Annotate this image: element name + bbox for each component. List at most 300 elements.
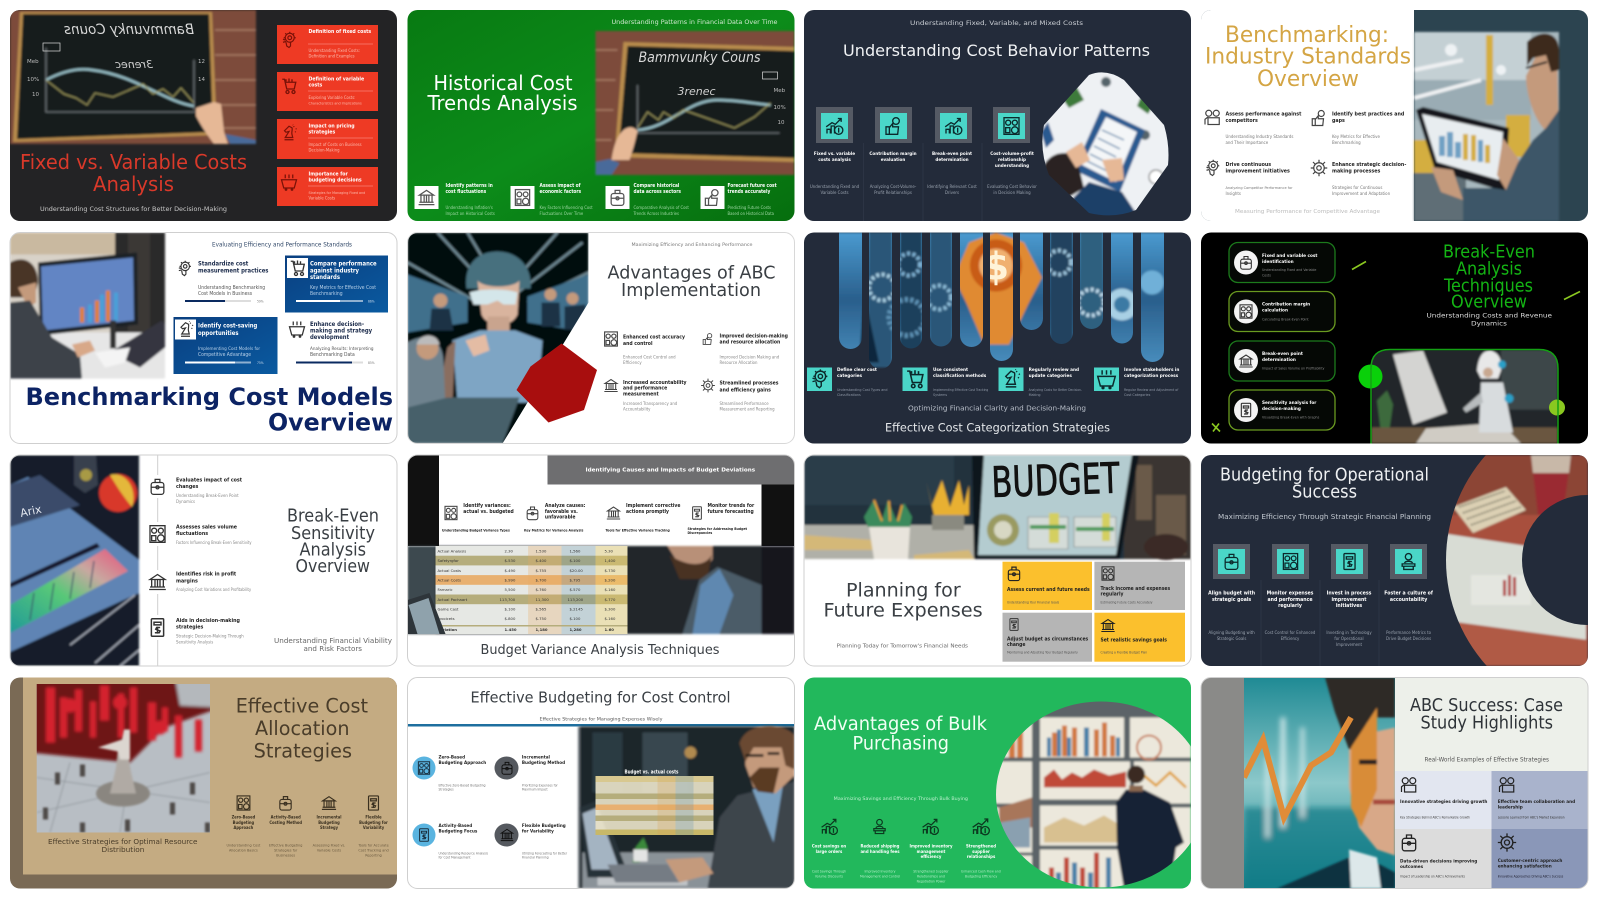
item: invest in process: initiatives	[1336, 603, 1362, 609]
photo: budget table and analyst: 1.530	[536, 548, 547, 554]
item: regularly review: update categories	[1029, 373, 1072, 379]
step: contribution margin calculation: Calculating Break-Even Point	[1262, 318, 1309, 322]
item: flexible	[358, 796, 389, 858]
item: enhanced cost accuracy: and control	[623, 341, 653, 347]
item: assess impact	[510, 183, 593, 216]
photo: budget table and analyst: 113,200	[568, 597, 584, 602]
quadrant: customer-centric: enhancing satisfaction	[1498, 864, 1552, 870]
quadrant: customer-centric: Innovative Approaches Driving ABC's Success	[1498, 874, 1564, 878]
item: drive continuous: improvement initiatives	[1226, 168, 1290, 174]
quadrant: data-driven decisions	[1395, 829, 1492, 888]
item: identify patterns: cost fluctuations	[446, 189, 487, 195]
box: importance for budgeting decisions: Variable Costs	[308, 196, 335, 200]
item: regularly review	[998, 367, 1082, 397]
item: foster accountability	[1384, 544, 1434, 642]
photo: chalkboard with cost curves: Meb	[27, 59, 39, 65]
card item: compare performance: against industry	[310, 268, 360, 274]
photo: budget table and analyst: Actual Pachaart	[438, 597, 468, 602]
photo: budget table and analyst: 1.450	[504, 627, 517, 632]
photo: chalkboard with cost curves: 12	[198, 59, 205, 65]
item: align budget: strategic goals	[1212, 597, 1251, 603]
item: incremental budgeting: Prioritizing Expenses for	[522, 784, 559, 788]
item: incremental: Incremental	[317, 814, 341, 820]
photo: budget table and analyst: 1,180	[536, 627, 548, 632]
item: incremental budgeting: Maximum Impact	[522, 788, 549, 792]
title: Sensitivity	[291, 523, 375, 544]
item: break-even point: Identifying Relevant Cost	[927, 184, 977, 190]
title	[427, 71, 578, 115]
photo: budget table and analyst: 1.60	[604, 627, 614, 632]
card: Break-Even Sensitivity Analysis Overview	[10, 455, 397, 666]
title: Break-Even	[287, 506, 379, 526]
item: align budget: Aligning Budgeting with	[1208, 630, 1255, 636]
item: monitor expenses: Efficiency	[1281, 636, 1300, 642]
title: Historical Cost	[434, 71, 573, 95]
item: strengthened supplier: Enhanced Cash Flow and	[961, 870, 1001, 874]
card item: compare performance: Compare performance	[310, 262, 377, 268]
title: Overview	[268, 408, 393, 436]
box: savings goals: Creating a Flexible Budget Plan	[1100, 650, 1147, 654]
title: Purchasing	[852, 734, 949, 754]
item: activity-based: Businesses	[276, 852, 295, 858]
item: reduced shipping	[860, 819, 900, 878]
item: identify patterns: Impact on Historical Costs	[446, 211, 495, 216]
item: incremental: Assessing Fixed vs.	[313, 842, 345, 848]
card item: enhance decision-making: 85%	[368, 361, 375, 365]
card: Benchmarking: Industry Standards Overview	[1201, 10, 1588, 221]
subtitle: and Risk Factors	[304, 645, 362, 653]
item: cost-volume-profit: Cost-volume-profit	[990, 151, 1034, 157]
card item: standardize: measurement practices	[198, 268, 268, 274]
item: cost-volume-profit: in Decision Making	[993, 190, 1031, 196]
box: savings goals: Set realistic savings goals	[1100, 638, 1167, 644]
item: define clear cost categories: Classifications	[837, 393, 861, 397]
card item: standardize: 59%	[257, 300, 264, 304]
title: Implementation	[621, 280, 761, 301]
item: forecast: trends accurately	[728, 189, 770, 195]
item: cost-volume-profit	[987, 107, 1037, 196]
photo: man viewing chart wall, in oval	[994, 698, 1191, 888]
item: assess performance	[1205, 110, 1302, 146]
header text: Understanding Patterns in Financial Data Over Time	[612, 18, 778, 26]
subtitle: Real-World Examples of Effective Strategies	[1424, 756, 1549, 764]
card: Effective Cost Allocation Strategies	[10, 678, 397, 888]
title: Effective Budgeting for Cost Control	[470, 688, 730, 706]
title: Planning for	[846, 580, 961, 602]
item: increased accountability: Increased Transparency and	[623, 401, 678, 407]
step: fixed and variable cost identification: identification	[1262, 259, 1294, 265]
item: activity-based budgeting: Understanding Resource Analysis	[438, 852, 488, 856]
item: aids decision-making: Aids in decision-making	[176, 618, 241, 624]
box: track income: Estimating Future Costs Accurately	[1100, 600, 1153, 604]
card: Historical Cost Trends Analysis	[408, 10, 794, 221]
title: Future Expenses	[824, 600, 983, 622]
title: Success	[1292, 482, 1357, 502]
budget table: Budget vs. actual costs	[624, 770, 679, 776]
photo: budget table and analyst: $.530	[504, 558, 516, 563]
item: contribution margin: Contribution margin	[869, 151, 917, 157]
title: Fixed vs. Variable Costs	[20, 150, 247, 174]
item: invest in process: Investing in Technology	[1326, 630, 1372, 636]
title: Effective Cost Categorization Strategies	[885, 420, 1110, 434]
title	[28, 386, 392, 431]
item: monitor expenses: Monitor expenses	[1267, 590, 1314, 596]
step: sensitivity analysis: Sensitivity analysis for	[1262, 400, 1317, 406]
item: reduced shipping: Reduced shipping	[861, 844, 900, 850]
item: zero-based: Zero-Based	[232, 814, 256, 820]
item: forecast	[700, 183, 777, 216]
item: monitor trends: Monitor trends for	[708, 503, 755, 509]
photo: budget table and analyst: $.300	[604, 606, 616, 612]
card item: standardize: Understanding Benchmarking	[198, 285, 265, 291]
title: Analysis	[300, 540, 366, 560]
photo: budget table and analyst: Safetyrgfor	[438, 558, 459, 563]
item: contribution margin: evaluation	[881, 157, 905, 163]
item: involve stakeholders: Involve stakeholders in	[1124, 367, 1179, 373]
title	[1207, 25, 1410, 86]
item: assess impact: Assess impact of	[540, 183, 581, 189]
item: activity-based budgeting: Activity-Based	[438, 823, 472, 829]
item: zero-based: Understanding Cost	[226, 842, 261, 848]
box: impact on pricing strategies: strategies	[308, 130, 335, 136]
card item: enhance decision-making: making and strategy	[310, 328, 373, 334]
photo: budget table and analyst: $.800	[504, 616, 516, 621]
box: importance for budgeting decisions: Strategies for Managing Fixed and	[308, 191, 365, 195]
photo: budget table and analyst: 2.30	[504, 548, 514, 554]
subtitle: Understanding Costs and Revenue	[1426, 312, 1552, 320]
photo: budget table and analyst: $.490	[504, 568, 516, 573]
step: sensitivity analysis	[1229, 390, 1335, 430]
item: break-even point: determination	[935, 157, 969, 163]
photo: budget table and analyst: $.770	[604, 597, 616, 602]
item: flexible budgeting: Financial Planning	[522, 856, 549, 860]
item: improved decision-making	[703, 334, 788, 366]
item: align budget: Align budget with	[1208, 590, 1255, 596]
item: break-even point: Break-even point	[932, 151, 972, 157]
step: break-even point determination: determination	[1262, 357, 1296, 363]
subtitle: Understanding Cost Structures for Better Decision-Making	[40, 205, 227, 213]
title: Analysis	[1456, 258, 1522, 280]
photo: chalkboard with cost curves: 10%	[27, 77, 39, 83]
photo: man at laptop with budget table	[578, 726, 794, 888]
photo: chalkboard: Meb	[774, 88, 786, 94]
title: Overview	[1451, 292, 1527, 312]
title: Trends Analysis	[427, 91, 577, 115]
photo: budget table and analyst: Actual Analysis	[438, 548, 466, 554]
title: Techniques	[1443, 276, 1533, 296]
photo: budget table and analyst: $.200	[604, 578, 616, 582]
item: invest in process	[1326, 544, 1372, 648]
box: track income: regularly	[1100, 592, 1124, 598]
item: activity-based budgeting	[412, 823, 488, 860]
item: forecast: Predicting Future Costs	[728, 205, 771, 210]
item: streamlined processes: Measurement and Reporting	[720, 406, 775, 412]
item: improved inventory: management	[917, 849, 945, 855]
photo: chalkboard with cost curves	[10, 10, 256, 144]
subtitle: Understanding Financial Viability	[274, 637, 392, 645]
item: zero-based: Approach	[234, 825, 254, 830]
photo: robot woman at desk	[1371, 350, 1558, 444]
card item: compare performance: 66%	[368, 300, 375, 304]
item: analyze causes	[524, 503, 586, 532]
item: analyze causes: Analyze causes:	[545, 503, 586, 509]
photo: budget table and analyst: $.795	[570, 578, 581, 582]
caption: Distribution	[102, 846, 144, 854]
item: assess impact: Key Factors Influencing Cost	[540, 205, 593, 210]
item: activity-based: Effective Budgeting	[269, 842, 302, 848]
quadrant: customer-centric	[1492, 829, 1588, 888]
box: assess needs: Assess current and future needs	[1007, 587, 1090, 593]
item: flexible: Tools for Accurate	[358, 842, 389, 848]
box: adjust budget	[1002, 613, 1092, 662]
quadrant: team collaboration: Effective team collaboration and	[1498, 799, 1575, 805]
photo: budget table and analyst: Actual Costs	[438, 568, 461, 573]
card item: compare performance: Key Metrics for Effective Cost	[310, 285, 376, 291]
item: assesses sales volume: Assesses sales volume	[176, 524, 237, 530]
item: zero-based	[226, 796, 261, 852]
item: involve stakeholders: categorization process	[1124, 373, 1179, 379]
box: track income: Track income and expenses	[1100, 586, 1170, 592]
box: definition of fixed costs: Definition and Examples	[308, 54, 355, 58]
title: Budget Variance Analysis Techniques	[480, 642, 720, 658]
item: improved inventory: Improved inventory	[910, 844, 953, 850]
title: Industry Standards	[1205, 44, 1411, 70]
item: contribution margin	[869, 107, 917, 196]
item: monitor trends: future forecasting	[708, 509, 754, 515]
photo: budget table and analyst: 1,560	[570, 548, 581, 554]
item: assesses sales volume: fluctuations	[176, 531, 208, 537]
item: fixed vs variable: Understanding Fixed and	[810, 184, 860, 190]
box: definition of variable costs	[277, 72, 378, 111]
item: define clear cost categories: categories	[837, 373, 863, 379]
card item: identify cost-saving: 75%	[257, 361, 264, 365]
photo: tablet with rainbow bar chart and apple	[10, 455, 139, 666]
photo: budget table and analyst: Variation	[438, 627, 457, 632]
item: reduced shipping: and handling fees	[860, 849, 900, 855]
item: streamlined processes	[701, 379, 779, 412]
item: aids decision-making: strategies	[176, 624, 203, 630]
box: impact on pricing strategies: Impact on pricing	[308, 124, 355, 130]
card: Effective Budgeting for Cost Control	[408, 678, 794, 888]
title: Study Highlights	[1420, 714, 1553, 734]
photo: man with tablet in factory	[1414, 32, 1559, 221]
box: adjust budget: change	[1007, 642, 1025, 648]
item: flexible budgeting: Utilizing Forecasting for Better	[522, 852, 568, 856]
photo: budget table and analyst: $20.00	[570, 568, 583, 573]
item: drive continuous: Analyzing Competitor Performance for	[1226, 185, 1293, 190]
step: fixed and variable cost identification	[1229, 242, 1335, 282]
step: contribution margin calculation: Contribution margin	[1262, 302, 1310, 308]
box: assess needs: Understanding Your Financial Goals	[1007, 600, 1060, 604]
item: identify patterns: Understanding Inflation's	[446, 205, 493, 210]
photo: tablet with rainbow bar chart and apple: Arix	[19, 503, 43, 520]
title: Benchmarking Cost Models	[26, 383, 393, 411]
photo: budget table and analyst: Farnaric	[438, 587, 453, 592]
step: break-even point determination: Break-even point	[1262, 351, 1303, 357]
photo: chess piece on board with red pieces	[36, 684, 210, 832]
subtitle: Effective Strategies for Managing Expenses Wisely	[540, 716, 663, 722]
item: zero-based budgeting: Strategies	[438, 788, 454, 792]
item: monitor trends	[688, 503, 755, 535]
item: identify variances: Understanding Budget Variance Types	[442, 528, 510, 532]
photo: budget table and analyst: $.755	[536, 568, 547, 573]
item: assess impact: economic factors	[540, 189, 582, 195]
item: streamlined processes: Streamlined processes	[720, 380, 779, 386]
photo: man with orange chart overlay	[1244, 678, 1395, 888]
item: foster accountability: Foster a culture of	[1384, 590, 1434, 596]
card: Budgeting for Operational Success	[1201, 455, 1600, 666]
card: Understanding Cost Behavior Patterns	[804, 10, 1191, 225]
item: zero-based budgeting: Budgeting Approach	[438, 760, 486, 766]
title: Allocation	[255, 717, 350, 740]
item: streamlined processes: Streamlined Performance	[720, 401, 769, 407]
item: consistent classification: Use consistent	[933, 367, 968, 373]
title	[814, 714, 987, 754]
green circle accents	[1358, 364, 1565, 416]
item: break-even point: Drivers	[945, 190, 959, 196]
item: define clear cost categories: Define clear cost	[837, 367, 877, 373]
card: ABC Success: Case Study Highlights	[1201, 678, 1588, 888]
photo: budget table and analyst: $.750	[536, 616, 547, 621]
photo: chalkboard with cost curves: 10	[32, 92, 39, 98]
item: incremental budgeting: Incremental	[522, 754, 550, 760]
box: track income	[1094, 562, 1185, 610]
item: analyze causes: unfavorable	[545, 514, 575, 520]
item: cost savings: Cost savings on	[812, 844, 846, 850]
title: Analysis	[93, 172, 174, 196]
header text: Maximizing Efficiency and Enhancing Performance	[632, 242, 753, 248]
photo: budget table and analyst: $.760	[536, 587, 547, 592]
item: enhance strategic: making processes	[1332, 168, 1380, 174]
photo: budget table and analyst: $.400	[536, 558, 547, 563]
item: identify best practices	[1312, 110, 1405, 146]
photo: budget table and analyst: $.730	[604, 568, 616, 573]
photo: budget table and analyst: $.565	[536, 606, 547, 612]
item: evaluates impact: Understanding Break-Even Point	[176, 493, 239, 499]
item: increased accountability	[604, 380, 687, 412]
item: fixed vs variable: Fixed vs. variable	[814, 151, 855, 157]
card item: compare performance: standards	[310, 275, 340, 281]
item: improved decision-making: Improved Decision Making and	[720, 354, 780, 360]
item: flexible: Variability	[363, 825, 385, 830]
dark circle overlay	[1522, 495, 1600, 625]
photo: budget table and analyst: 5,500	[504, 587, 516, 592]
item: zero-based: Allocation Basics	[229, 848, 258, 852]
step: fixed and variable cost identification: Fixed and variable cost	[1262, 253, 1317, 259]
quadrant: team collaboration: Lessons Learned from ABC's Market Expansion	[1498, 816, 1565, 820]
photo: budget table and analyst: Game Cast	[438, 606, 459, 612]
item: identifies risk	[147, 570, 252, 594]
card: Effective Cost Categorization Strategies	[804, 232, 1191, 444]
item: fixed vs variable: Variable Costs	[820, 190, 849, 196]
item: evaluates impact: Evaluates impact of cost	[176, 478, 243, 484]
item: strengthened supplier: Strengthened	[966, 844, 996, 850]
box: impact on pricing strategies: Decision-Making	[308, 148, 340, 152]
title	[1220, 464, 1429, 502]
item: flexible: Flexible	[365, 814, 382, 820]
photo: clipboard in rounded blob	[1042, 72, 1168, 216]
item: identify variances: actual vs. budgeted	[463, 509, 514, 515]
item: flexible budgeting: for Variability	[522, 828, 554, 834]
box: definition of variable costs: Definition of variable	[308, 76, 364, 82]
item: regularly review: Making	[1029, 393, 1041, 397]
item: identify patterns	[414, 183, 495, 216]
item: assess performance: competitors	[1226, 118, 1258, 124]
photo: budget table and analyst: 5.30	[604, 548, 614, 554]
photo: budget table and analyst: $.100	[570, 558, 581, 563]
photo: budget table and analyst: Actual Costs	[438, 578, 461, 582]
item: aids decision-making: Strategic Decision-Making Through	[176, 634, 244, 640]
item: compare historical: data across sectors	[634, 189, 681, 195]
item: cost-volume-profit: understanding	[995, 163, 1029, 169]
budget table	[596, 770, 714, 835]
card item: enhance decision-making	[288, 321, 374, 364]
card item: identify cost-saving: opportunities	[198, 331, 238, 337]
title: Break-Even	[1443, 242, 1535, 262]
quadrant: innovative strategies: Key Strategies Behind ABC's Remarkable Growth	[1400, 816, 1470, 820]
quadrant: data-driven decisions: outcomes	[1400, 864, 1424, 870]
item: enhance strategic: Strategies for Continuous	[1332, 185, 1382, 191]
item: cost savings	[812, 819, 846, 878]
item: assess impact: Fluctuations Over Time	[540, 211, 584, 216]
photo: budget table and analyst: $.100	[504, 606, 516, 612]
title: Budgeting for Operational	[1220, 464, 1429, 486]
title	[1443, 242, 1535, 312]
step: break-even point determination: Impact of Sales Volume on Profitability	[1262, 366, 1324, 370]
photo: chalkboard: 10%	[774, 105, 786, 111]
item: consistent classification: Implementing Effective Cost Tracking	[933, 388, 988, 392]
quadrant: data-driven decisions: Data-driven decisions improving	[1400, 858, 1477, 864]
item: regularly review: Analyzing Costs for Better Decision-	[1029, 388, 1082, 392]
item: flexible budgeting	[494, 823, 568, 860]
item: improved decision-making: and resource allocation	[720, 340, 780, 346]
quadrant: team collaboration	[1492, 771, 1588, 829]
item: monitor expenses	[1265, 544, 1316, 642]
header text: Evaluating Efficiency and Performance Standards	[212, 242, 352, 248]
card item: identify cost-saving: Competitive Advantage	[198, 352, 251, 358]
item: implement corrective: Implement corrective	[626, 503, 680, 509]
item: enhance strategic: Improvement and Adaptation	[1332, 191, 1391, 197]
box: adjust budget: Monitoring and Adjusting Your Budget Regularly	[1007, 650, 1078, 654]
box: definition of variable costs: Exploring Variable Costs:	[308, 95, 355, 100]
subtitle: Planning Today for Tomorrow's Financial Needs	[837, 644, 968, 650]
item: flexible: Reporting	[365, 852, 382, 858]
photo: chalkboard with cost curves: Bammvunky Couns	[64, 22, 194, 38]
photo: budget table and analyst: $.2145	[570, 606, 583, 612]
photo: budget table and analyst	[408, 546, 794, 634]
item: compare historical	[606, 183, 689, 216]
photo: chalkboard with cost curves: 14	[198, 77, 205, 83]
card: Benchmarking Cost Models Overview	[10, 232, 397, 444]
photo: budget table and analyst: $.160	[604, 587, 616, 592]
item: align budget	[1208, 544, 1255, 642]
photo: budget table and analyst: $.160	[604, 616, 616, 621]
box: savings goals	[1094, 613, 1185, 662]
subtitle: Dynamics	[1471, 320, 1508, 328]
box: impact on pricing strategies	[277, 119, 378, 159]
card item: identify cost-saving: Identify cost-saving	[198, 324, 258, 330]
box: assess needs	[1002, 562, 1092, 610]
red hexagon	[516, 344, 597, 422]
title: Advantages of Bulk	[814, 714, 987, 735]
item: consistent classification: Systems	[933, 393, 947, 397]
step: contribution margin calculation: calculation	[1262, 308, 1288, 314]
item: identifies risk: Analyzing Cost Variations and Profitability	[176, 587, 252, 592]
title	[824, 580, 983, 622]
title: Strategies	[254, 740, 352, 762]
card item: standardize: Cost Models in Business	[198, 291, 253, 297]
item: assess performance: and Their Importance	[1226, 140, 1269, 146]
